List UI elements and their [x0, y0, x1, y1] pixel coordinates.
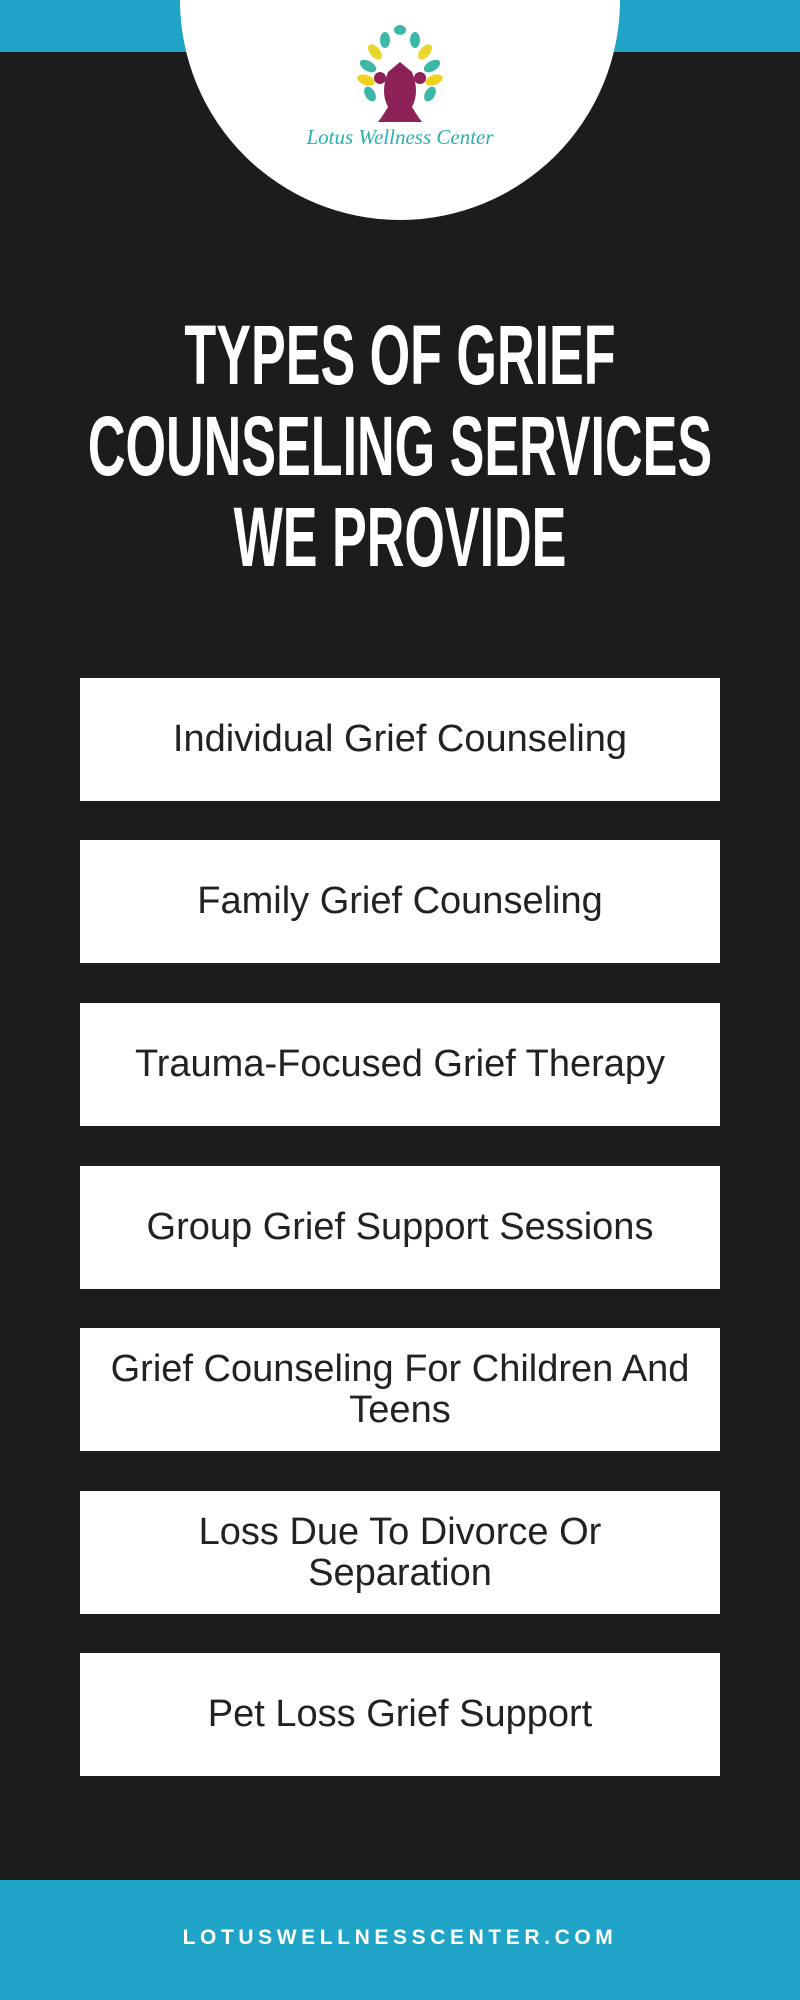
service: pet — [80, 1653, 720, 1776]
service: individual: Individual Grief Counseling — [173, 718, 627, 760]
service: individual — [80, 678, 720, 801]
service: children: Grief Counseling For Children And Teens — [111, 1348, 689, 1430]
title: WE PROVIDE — [234, 490, 566, 584]
title: TYPES OF GRIEF — [184, 308, 616, 402]
service: trauma: Trauma-Focused Grief Therapy — [135, 1043, 665, 1085]
service: divorce: Loss Due To Divorce Or — [199, 1510, 601, 1552]
service: trauma — [80, 1003, 720, 1126]
footer — [0, 1880, 800, 2000]
service: divorce: Separation — [308, 1552, 492, 1594]
title — [88, 308, 712, 584]
brand name: Lotus Wellness Center — [305, 125, 494, 149]
service: family — [80, 840, 720, 963]
service: family: Family Grief Counseling — [197, 880, 603, 922]
service: pet: Pet Loss Grief Support — [208, 1693, 592, 1735]
service: divorce — [80, 1491, 720, 1614]
logo circle — [180, 0, 620, 220]
service: group — [80, 1166, 720, 1289]
title: COUNSELING SERVICES — [88, 399, 712, 493]
footer: LOTUSWELLNESSCENTER.COM — [183, 1926, 617, 1949]
logo — [305, 25, 494, 149]
service: group: Group Grief Support Sessions — [147, 1206, 653, 1248]
icon: tree — [356, 25, 444, 122]
service: children — [80, 1328, 720, 1451]
